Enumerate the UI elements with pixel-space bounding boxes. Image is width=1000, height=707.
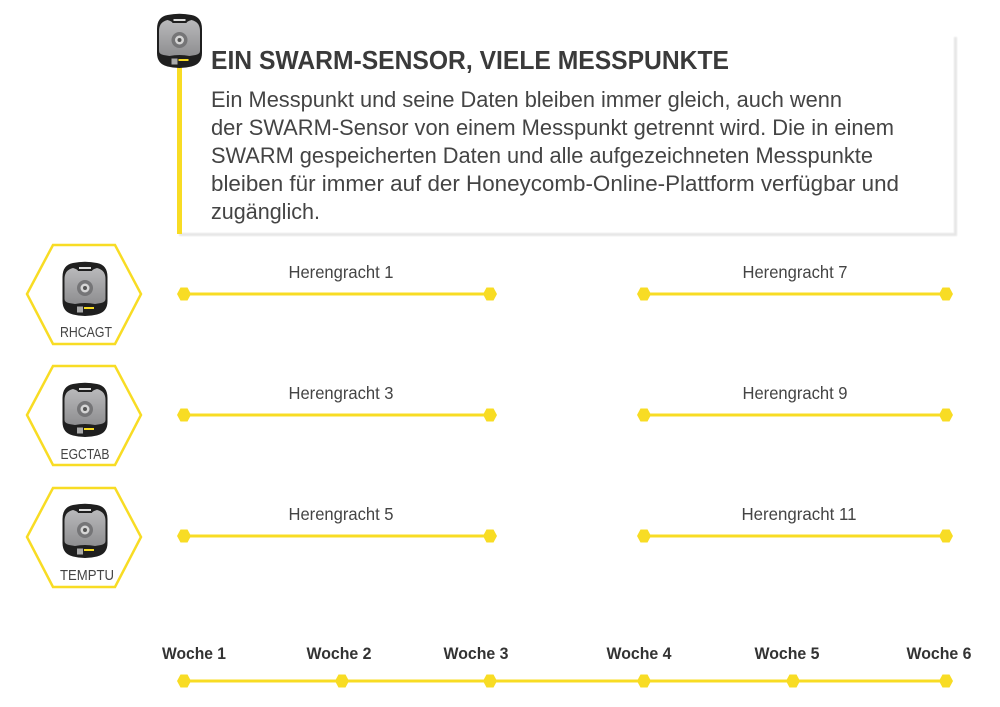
icon: sensor [62,504,108,558]
body text: zugänglich. [211,199,320,224]
body text: bleiben für immer auf der Honeycomb-Online-Plattform verfügbar und [211,171,899,196]
timeline: Herengracht 5: Herengracht 5 [288,504,394,524]
weekly timeline axis: Woche 5 [754,644,820,663]
icon: sensor [62,262,108,316]
hexagon [27,488,141,587]
body text: SWARM gespeicherten Daten und alle aufgezeichneten Messpunkte [211,143,873,168]
icon: sensor [62,383,108,437]
sensor: EGCTAB [27,366,141,465]
timeline: Herengracht 1: Herengracht 1 [288,262,394,282]
sensor: RHCAGT [27,245,141,344]
hexagon [27,245,141,344]
timeline: Herengracht 7 [637,262,953,300]
timeline: Herengracht 3 [177,383,497,422]
weekly timeline axis: Woche 1 [162,644,226,663]
timeline: Herengracht 9: Herengracht 9 [742,383,848,403]
weekly timeline axis [162,644,972,688]
label: TEMPTU [60,568,114,584]
body text: der SWARM-Sensor von einem Messpunkt getrennt wird. Die in einem [211,115,894,140]
timeline: Herengracht 5 [177,504,497,542]
timeline: Herengracht 11: Herengracht 11 [742,504,856,524]
hexagon [27,366,141,465]
label: RHCAGT [60,325,112,341]
panel: intro text card [177,37,957,236]
label: EGCTAB [60,447,110,463]
body text [211,87,899,224]
timeline: Herengracht 9 [637,383,953,422]
weekly timeline axis: Woche 4 [606,644,672,663]
icon: SWARM sensor header [157,14,202,68]
weekly timeline axis: Woche 2 [306,644,372,663]
body text: Ein Messpunkt und seine Daten bleiben immer gleich, auch wenn [211,87,842,112]
timeline: Herengracht 3: Herengracht 3 [288,383,394,403]
timeline: Herengracht 1 [177,262,497,300]
weekly timeline axis: Woche 3 [444,644,508,663]
weekly timeline axis: Woche 6 [906,644,972,663]
timeline: Herengracht 7: Herengracht 7 [742,262,848,282]
heading: EIN SWARM-SENSOR, VIELE MESSPUNKTE [211,45,729,75]
timeline: Herengracht 11 [637,504,953,542]
sensor: TEMPTU [27,488,141,587]
